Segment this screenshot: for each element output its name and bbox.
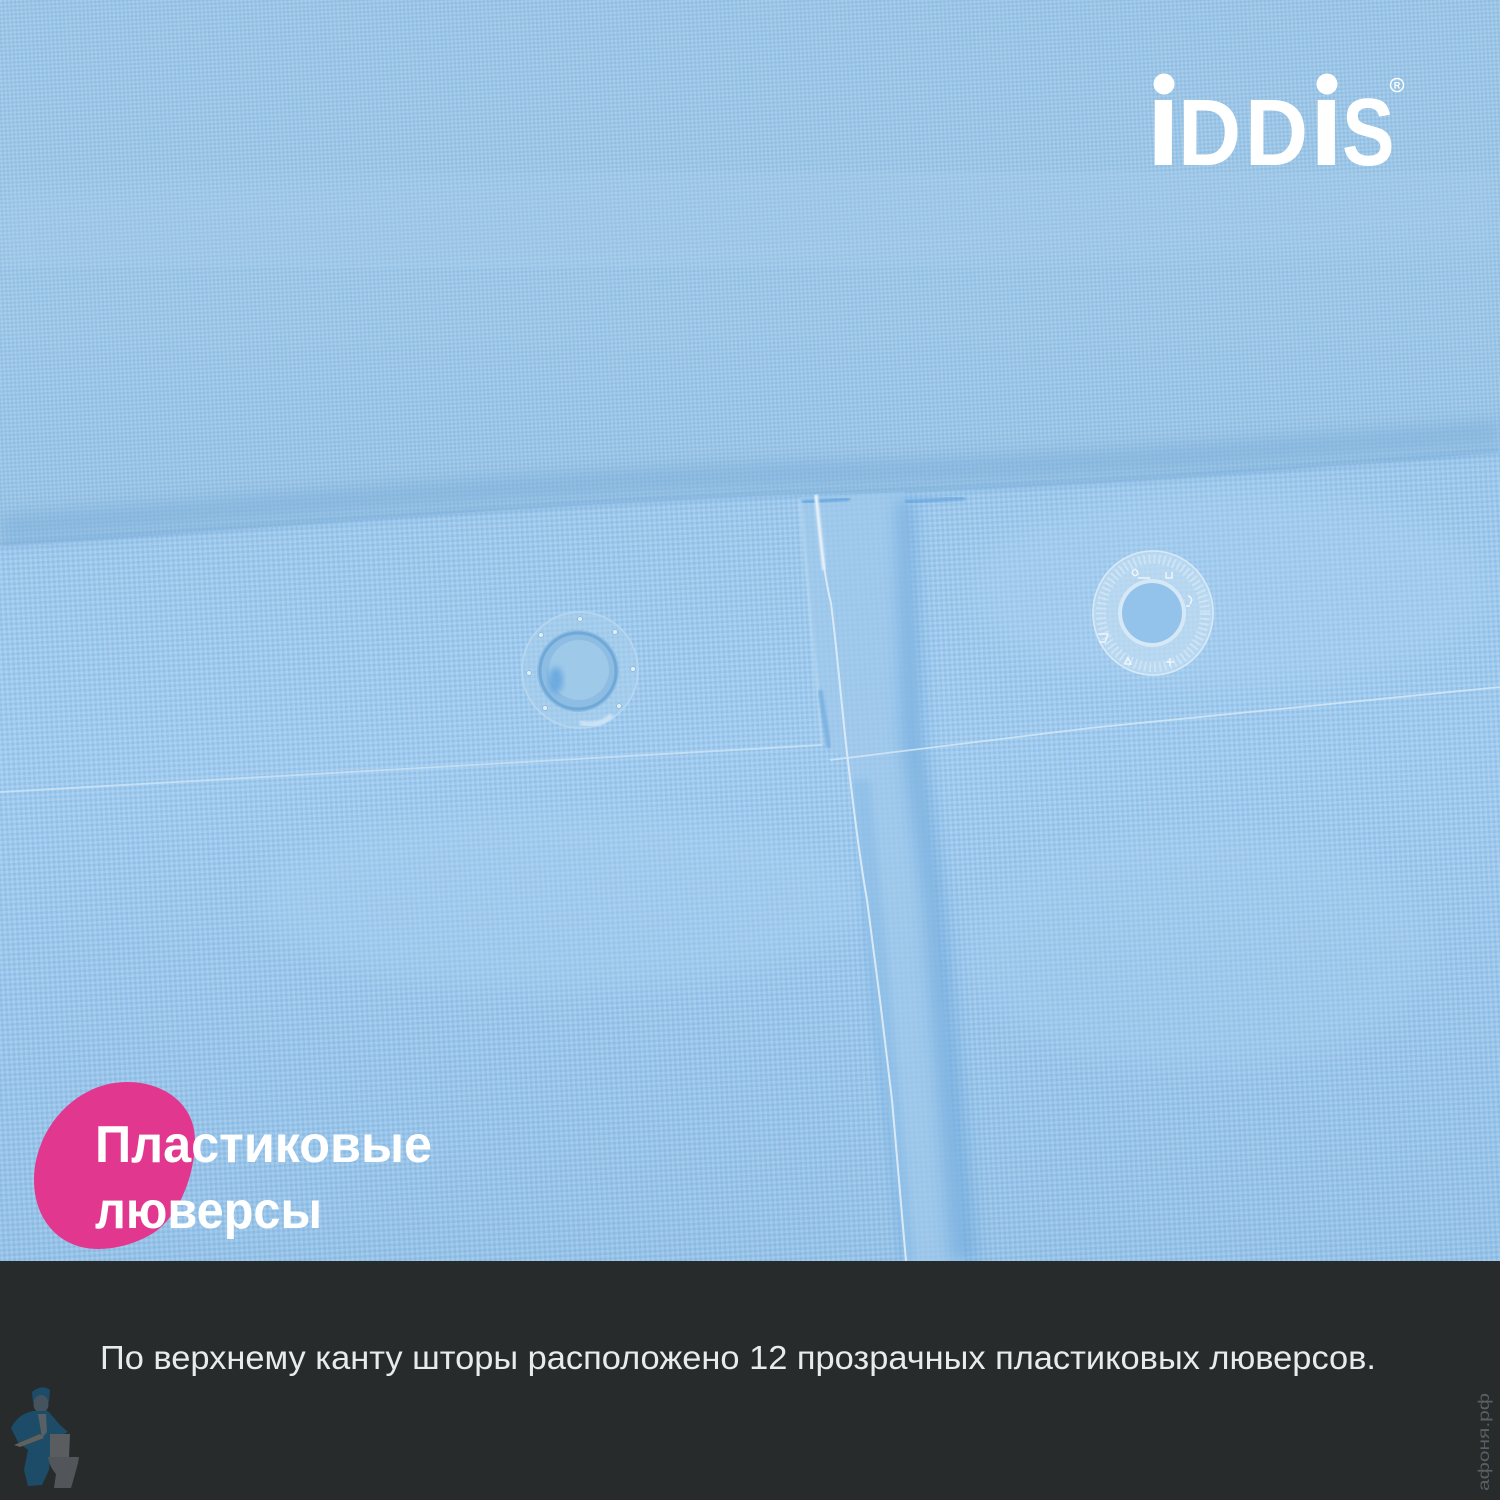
description text: По верхнему канту шторы расположено 12 прозрачных пластиковых люверсов.	[100, 1339, 1376, 1376]
grommet: left, transparent plastic eyelet	[521, 611, 639, 729]
logo: IDDIS	[1154, 74, 1404, 166]
heading: люверсы	[95, 1182, 322, 1240]
right panel light sheen	[260, 490, 1490, 1070]
logo: IDDIS: D	[1178, 80, 1241, 186]
logo: IDDIS: S	[1342, 79, 1395, 186]
heading: Пластиковые	[95, 1116, 432, 1174]
logo: IDDIS: i	[1309, 53, 1344, 192]
stitch: horizontal seam	[0, 687, 1500, 792]
grommet: right, transparent plastic eyelet	[1092, 550, 1214, 676]
accent: pink blob	[34, 1082, 195, 1249]
icon: plumber mascot with toilet	[11, 1387, 79, 1488]
curtain top hem: upper fabric above fold	[0, 0, 1500, 546]
logo: IDDIS: R	[1394, 80, 1401, 90]
footer band	[0, 1261, 1500, 1500]
heading	[95, 1116, 432, 1240]
logo: IDDIS: i	[1146, 53, 1181, 192]
logo: IDDIS: D	[1245, 80, 1308, 186]
vertical pleat tab with shading	[800, 492, 978, 1261]
watermark: afonya.rf: афоня.рф	[1476, 1393, 1493, 1491]
stitch: vertical seam	[816, 495, 906, 1261]
